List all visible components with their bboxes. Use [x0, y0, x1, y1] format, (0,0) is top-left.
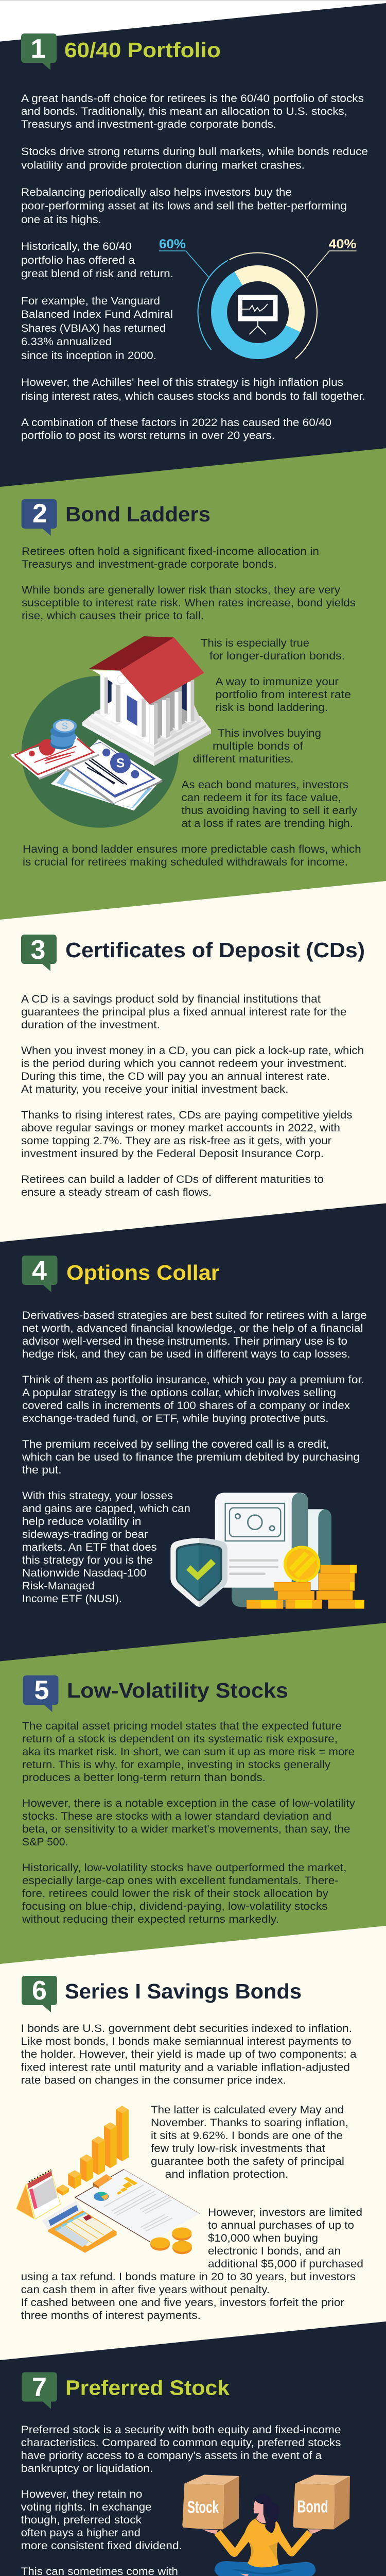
text block: bond ladder wrap: for longer-duration bonds.	[209, 650, 345, 662]
text block: I bonds: fixed interest rate until maturity and a variable inflation-adjusted	[21, 2062, 350, 2073]
sub: foot	[240, 2573, 291, 2576]
sub: hands	[202, 2529, 323, 2534]
heading: 1 60/40 Portfolio: 1	[31, 34, 45, 64]
panel: certificates of deposit	[0, 881, 386, 1243]
text block: I bonds: The latter is calculated every May and	[151, 2104, 344, 2116]
text block: historical returns: great blend of risk and return.	[21, 268, 173, 280]
text block: bond intro: While bonds are generally lower risk than stocks, they are very	[22, 584, 341, 596]
sub: bond box	[293, 2475, 350, 2529]
text block: bond intro: susceptible to interest rate risk. When rates increase, bond yields	[22, 597, 356, 609]
text block: bond intro	[22, 546, 356, 622]
text block: CDs: Thanks to rising interest rates, CDs are paying competitive yields	[21, 1109, 352, 1121]
panel: 60/40 portfolio	[0, 3, 386, 488]
text block: preferred stock: characteristics. Compared to common equity, preferred stocks	[21, 2437, 341, 2449]
sub: coins	[150, 2227, 192, 2254]
text block: CDs: investment insured by the Federal Deposit Insurance Corp.	[21, 1148, 324, 1160]
text block: bond ladder wrap: can redeem it for its face value,	[181, 792, 341, 804]
chart: 60/40 donut: 60%	[159, 237, 186, 251]
text block: I bonds: I bonds are U.S. government debt securities indexed to inflation.	[21, 2023, 352, 2035]
text block: derivatives: help reduce volatility in	[22, 1516, 141, 1528]
text block: bond ladder wrap: This is especially true	[201, 637, 309, 649]
sub: sweater	[215, 2518, 312, 2567]
heading: 4 Options Collar: 4	[32, 1256, 47, 1286]
text block: intro: one at its highs.	[21, 214, 101, 226]
text block: historical returns: portfolio has offered a	[21, 255, 135, 266]
text block: preferred stock: have priority access to a company's assets in the event of a	[21, 2450, 322, 2462]
text block: derivatives: markets. An ETF that does	[22, 1541, 157, 1553]
heading: 3 Certificates of Deposit: Certificates of Deposit (CDs)	[65, 938, 365, 962]
text block: Achilles heel: A combination of these factors in 2022 has caused the 60/40	[21, 417, 331, 429]
heading: 5 Low-Volatility Stocks	[23, 1675, 288, 1712]
heading: 2 Bond Ladders: 2	[32, 499, 47, 529]
text block: I bonds: However, investors are limited	[208, 2207, 362, 2218]
text block: historical returns: Balanced Index Fund Admiral	[21, 309, 173, 320]
text block: I bonds: and inflation protection.	[165, 2168, 288, 2180]
icon: presentation board	[238, 295, 278, 334]
sub: calendar	[16, 2170, 60, 2219]
text block: historical returns: since its inception in 2000.	[21, 350, 156, 362]
text block: intro: Rebalancing periodically also helps investors buy the	[21, 187, 292, 198]
text block: CDs: During this time, the CD will pay you an annual interest rate.	[21, 1071, 330, 1082]
text block: I bonds: Like most bonds, I bonds make semiannual interest payments to	[21, 2036, 351, 2047]
text block: bond ladder wrap	[23, 637, 361, 868]
text block: bond ladder wrap: A way to immunize your	[215, 676, 339, 688]
text block: CDs: duration of the investment.	[21, 1019, 160, 1031]
text block: low-volatility: beta, or sensitivity to a wider market's movements, than say, the	[22, 1823, 350, 1835]
text block: intro: volatility and provide protection during market crashes.	[21, 160, 305, 171]
text block: derivatives: which can be used to finance the premium debited by purchasing	[22, 1451, 360, 1463]
text block: derivatives: Think of them as portfolio insurance, which you pay a premium for.	[22, 1374, 364, 1386]
text block: Achilles heel: However, the Achilles' heel of this strategy is high inflation plus	[21, 377, 343, 388]
text block: intro: Stocks drive strong returns during bull markets, while bonds reduce	[21, 146, 368, 158]
chart: 60/40 donut: 40%	[328, 237, 356, 251]
text block: low-volatility	[22, 1720, 356, 1925]
text block: CDs: Retirees can build a ladder of CDs of different maturities to	[21, 1174, 324, 1185]
text block: derivatives: and gains are capped, which can	[22, 1503, 190, 1515]
text block: bond ladder wrap: Having a bond ladder ensures more predictable cash flows, which	[23, 843, 361, 855]
text block: CDs: ensure a steady stream of cash flows.	[21, 1187, 212, 1198]
text block: bond ladder wrap: thus avoiding having to sell it early	[181, 805, 358, 817]
text block: low-volatility: return. This is why, for example, investing in stocks generally	[22, 1759, 331, 1771]
heading: 3 Certificates of Deposit: 3	[31, 935, 45, 965]
text block: low-volatility: without reducing their expected returns markedly.	[22, 1913, 279, 1925]
text block: bond ladder wrap: different maturities.	[192, 753, 293, 765]
heading: 7 Preferred Stock: Preferred Stock	[65, 2376, 230, 2400]
text block: I bonds: guarantee both the safety of principal	[151, 2156, 344, 2167]
sub: hair	[254, 2494, 279, 2533]
sub: stock box	[182, 2475, 239, 2529]
text block: preferred stock: bankruptcy or liquidation.	[21, 2463, 153, 2475]
text block: low-volatility: especially large-cap ones with excellent fundamentals. There-	[22, 1875, 339, 1887]
illustration: bar chart, calendar, calculator, report and coins	[16, 2106, 200, 2254]
sub: red bill	[10, 736, 99, 779]
text block: preferred stock: voting rights. In exchange	[21, 2501, 152, 2513]
sub: blue bill	[65, 739, 163, 804]
text block: derivatives: net worth, advanced financial knowledge, or the help of a financial	[22, 1323, 363, 1334]
text block: preferred stock: However, they retain no	[21, 2488, 143, 2500]
sub: face and neck	[254, 2499, 266, 2523]
text block: derivatives: A popular strategy is the options collar, which involves selling	[22, 1387, 336, 1399]
text block: low-volatility: The capital asset pricing model states that the expected future	[22, 1720, 342, 1732]
sub: coin stack	[50, 719, 77, 750]
text block: low-volatility: However, there is a notable exception in the case of low-volatility	[22, 1798, 356, 1809]
text block: CDs: above regular savings or money market accounts in 2022, with	[21, 1122, 340, 1134]
heading: 7 Preferred Stock: 7	[32, 2372, 47, 2402]
text block: Achilles heel: rising interest rates, which causes stocks and bonds to fall together.	[21, 391, 365, 402]
sub: gold bars	[247, 1565, 364, 1608]
sub: shield with checkmark	[170, 1538, 227, 1607]
text block: historical returns: Historically, the 60/40	[21, 241, 132, 252]
panel: series I savings bonds	[0, 1926, 386, 2361]
sub: calculator	[42, 2201, 117, 2253]
text block: bond intro: rise, which causes their price to fall.	[22, 610, 204, 622]
text block: intro: poor-performing asset at its lows and sell the better-performing	[21, 200, 347, 212]
text block: bond ladder wrap: multiple bonds of	[213, 740, 303, 752]
text block: I bonds: using a tax refund. I bonds mature in 20 to 30 years, but investors	[21, 2271, 356, 2283]
text block: bond intro: Retirees often hold a significant fixed-income allocation in	[22, 546, 319, 557]
illustration: woman balancing stock and bond boxes	[182, 2475, 350, 2576]
text block: derivatives: the put.	[22, 1464, 62, 1476]
heading: 6 Series I Savings Bonds: 6	[32, 1976, 47, 2006]
illustration: bank with bonds and coins	[10, 636, 211, 828]
heading: 1 60/40 Portfolio	[21, 33, 221, 70]
text block: derivatives: Nationwide Nasdaq-100	[22, 1567, 147, 1579]
text block: low-volatility: Historically, low-volatility stocks have outperformed the market,	[22, 1862, 347, 1874]
text block: bond ladder wrap: As each bond matures, investors	[181, 779, 348, 791]
text block: CDs	[21, 993, 364, 1198]
text block: intro: A great hands-off choice for retirees is the 60/40 portfolio of stocks	[21, 93, 364, 105]
heading: 5 Low-Volatility Stocks: 5	[34, 1675, 49, 1705]
text block: preferred stock	[21, 2424, 355, 2576]
text block: I bonds: the holder. However, their yield is made up of two components: a	[21, 2048, 357, 2060]
text block: derivatives: Income ETF (NUSI).	[22, 1593, 122, 1605]
text block: historical returns: 6.33% annualized	[21, 336, 112, 348]
text block: derivatives: With this strategy, your losses	[22, 1490, 173, 1502]
text block: intro	[21, 93, 368, 226]
heading: 4 Options Collar	[22, 1256, 220, 1292]
heading: 5 Low-Volatility Stocks: Low-Volatility Stocks	[67, 1679, 288, 1702]
text block: derivatives: Risk-Managed	[22, 1580, 95, 1592]
sub: blue bill: S	[116, 756, 125, 770]
text block: derivatives	[22, 1310, 367, 1605]
sub: bond box: Bond	[297, 2498, 328, 2517]
text block: I bonds: If cashed between one and five years, investors forfeit the prior	[21, 2297, 344, 2309]
text block: low-volatility: focusing on blue-chip, dividend-paying, low-volatility stocks	[22, 1901, 328, 1912]
text block: historical returns: Shares (VBIAX) has returned	[21, 323, 166, 334]
text block: low-volatility: stocks. These are stocks with a lower standard deviation and	[22, 1810, 331, 1822]
text block: bond ladder wrap: portfolio from interest rate	[215, 689, 351, 701]
sub: report document	[75, 2170, 200, 2242]
text block: I bonds: few truly low-risk investments that	[151, 2143, 325, 2155]
text block: derivatives: this strategy for you is the	[22, 1554, 153, 1566]
text block: CDs: When you invest money in a CD, you can pick a lock-up rate, which	[21, 1045, 364, 1057]
text block: derivatives: Derivatives-based strategies are best suited for retirees with a large	[22, 1310, 367, 1321]
heading: 3 Certificates of Deposit	[21, 935, 365, 971]
text block: preferred stock: Preferred stock is a security with both equity and fixed-income	[21, 2424, 341, 2436]
sub: rising bars	[57, 2106, 129, 2196]
panel: low-volatility stocks	[0, 1623, 386, 1965]
heading: 2 Bond Ladders: Bond Ladders	[65, 502, 210, 526]
sub: stock box: Stock	[187, 2498, 219, 2517]
text block: CDs: some topping 2.7%. They are as risk-free as it gets, with your	[21, 1135, 331, 1147]
text block: bond ladder wrap: This involves buying	[218, 727, 321, 739]
text block: intro: Treasurys and investment-grade corporate bonds.	[21, 118, 276, 130]
heading: 6 Series I Savings Bonds	[22, 1976, 302, 2012]
text block: derivatives: covered calls in increments of 100 shares of a company or index	[22, 1400, 350, 1412]
heading: 7 Preferred Stock	[22, 2372, 230, 2409]
illustration: document, shield and gold coins	[170, 1493, 364, 1608]
text block: CDs: At maturity, you receive your initial investment back.	[21, 1083, 289, 1095]
text block: I bonds: can cash them in after five years without penalty.	[21, 2284, 270, 2296]
text block: preferred stock: more consistent fixed dividend.	[21, 2540, 182, 2552]
sub: pants	[215, 2561, 315, 2576]
text block: preferred stock: often pays a higher and	[21, 2527, 141, 2539]
text block: I bonds: it sits at 9.62%. I bonds are one of the	[151, 2130, 343, 2142]
text block: I bonds	[21, 2023, 363, 2321]
text block: I bonds: additional $5,000 if purchased	[208, 2258, 363, 2270]
text block: low-volatility: aka its market risk. In short, we can sum it up as more risk = more	[22, 1746, 355, 1758]
text block: CDs: is the period during which you cannot redeem your investment.	[21, 1058, 347, 1070]
panel: preferred stock	[0, 2321, 386, 2576]
text block: I bonds: to annual purchases of up to	[208, 2219, 354, 2231]
heading: 6 Series I Savings Bonds: Series I Savings Bonds	[65, 1979, 302, 2003]
sub: light blue bill	[50, 769, 161, 810]
sub: coin stack: S	[62, 721, 68, 732]
text block: derivatives: exchange-traded fund, or ETF, while buying protective puts.	[22, 1413, 328, 1425]
heading: 4 Options Collar: Options Collar	[66, 1261, 220, 1284]
panel: bond ladders	[0, 448, 386, 921]
text block: bond ladder wrap: is crucial for retirees making scheduled withdrawals for income.	[23, 856, 348, 868]
chart: 60/40 donut	[159, 237, 357, 359]
text block: derivatives: advisor well-versed in these instruments. Their primary use is to	[22, 1335, 347, 1347]
text block: I bonds: three months of interest payments.	[21, 2310, 201, 2321]
text block: bond ladder wrap: risk is bond laddering.	[215, 702, 328, 714]
text block: preferred stock: though, preferred stock	[21, 2514, 142, 2526]
text block: bond ladder wrap: at a loss if rates are trending high.	[181, 818, 353, 829]
text block: derivatives: sideways-trading or bear	[22, 1529, 148, 1540]
text block: historical returns	[21, 241, 173, 362]
text block: I bonds: November. Thanks to soaring inflation,	[151, 2117, 348, 2129]
text block: I bonds: rate based on changes in the consumer price index.	[21, 2074, 286, 2087]
text block: CDs: guarantees the principal plus a fixed annual interest rate for the	[21, 1006, 347, 1018]
text block: low-volatility: fore, retirees could lower the risk of their stock allocation by	[22, 1888, 329, 1900]
text block: intro: and bonds. Traditionally, this meant an allocation to U.S. stocks,	[21, 106, 347, 117]
text block: Achilles heel	[21, 377, 365, 442]
text block: derivatives: hedge risk, and they can be used in different ways to cap losses.	[22, 1348, 350, 1360]
heading: 1 60/40 Portfolio: 60/40 Portfolio	[64, 38, 221, 62]
text block: I bonds: electronic I bonds, and an	[208, 2245, 341, 2257]
text block: low-volatility: return of a stock is dependent on its systematic risk exposure,	[22, 1733, 338, 1745]
panel: options collar	[0, 1204, 386, 1662]
text block: bond intro: Treasurys and investment-grade corporate bonds.	[22, 558, 277, 570]
heading: 2 Bond Ladders	[22, 499, 210, 536]
sub: gold coin	[284, 1546, 320, 1583]
text block: low-volatility: S&P 500.	[22, 1836, 68, 1848]
text block: Achilles heel: portfolio to post its worst returns in over 20 years.	[21, 430, 275, 442]
text block: low-volatility: produces a better long-term return than bonds.	[22, 1772, 266, 1784]
text block: historical returns: For example, the Vanguard	[21, 295, 160, 307]
text block: I bonds: $10,000 when buying	[208, 2232, 318, 2244]
text block: CDs: A CD is a savings product sold by financial institutions that	[21, 993, 321, 1005]
text block: derivatives: The premium received by selling the covered call is a credit,	[22, 1438, 329, 1450]
